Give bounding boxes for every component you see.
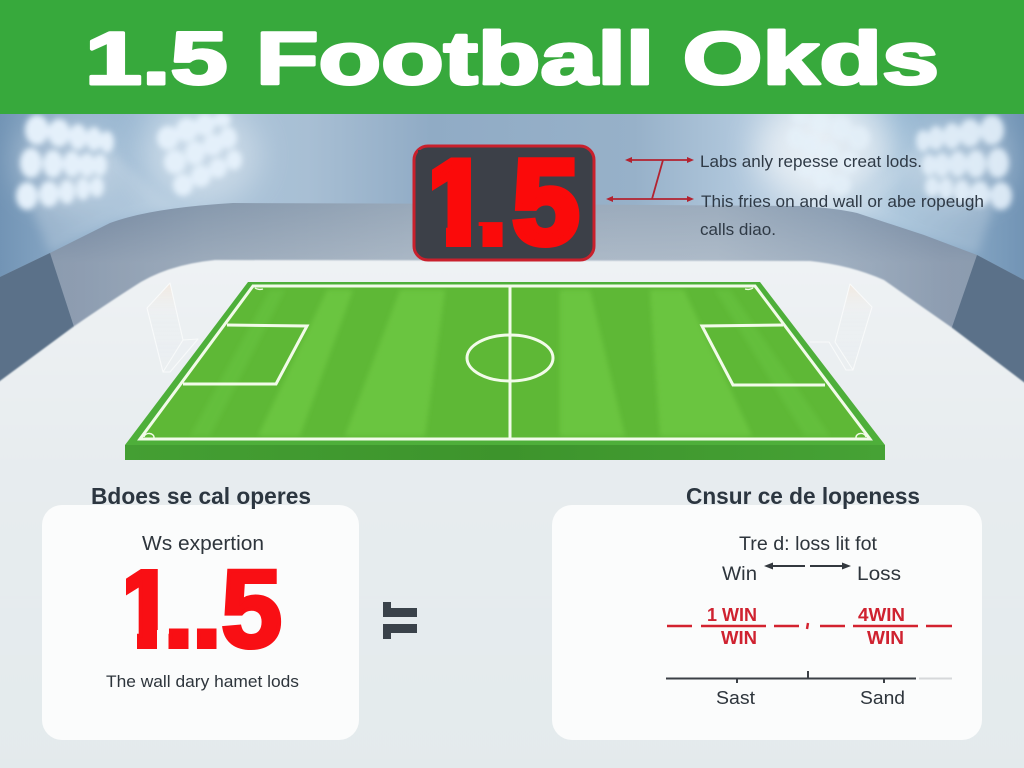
mowing stripes	[190, 290, 830, 436]
callout text: This fries on and wall or abe ropeugh	[701, 193, 984, 211]
card caption: The wall dary hamet lods	[106, 672, 299, 691]
stadium floodlights	[16, 112, 1012, 210]
goal left	[147, 283, 198, 372]
callout arrows	[606, 157, 694, 202]
fraction one win: WIN	[721, 628, 757, 648]
fraction one win: 1 WIN	[707, 605, 757, 625]
panel: right win loss card	[552, 505, 982, 740]
axis label sast: Sast	[716, 688, 755, 708]
scoreboard value: 1.5	[423, 136, 579, 270]
win label: Win	[722, 564, 757, 585]
loss label: Loss	[857, 564, 901, 585]
icon: floodlight cluster inner left	[157, 113, 242, 196]
header banner	[0, 0, 1024, 114]
football pitch	[125, 282, 885, 460]
big odds value: 1..5	[115, 548, 282, 671]
fraction one win	[707, 605, 757, 648]
fraction four win	[858, 605, 905, 648]
scoreboard	[414, 136, 594, 270]
timeline axis	[666, 671, 952, 683]
callout text	[700, 153, 984, 239]
fraction four win: 4WIN	[858, 605, 905, 625]
icon: floodlight cluster inner right	[787, 112, 870, 196]
icon: floodlight cluster far right	[916, 115, 1012, 210]
icon: rotated equals symbol	[383, 602, 417, 639]
corner marks	[144, 288, 866, 438]
callout text: Labs anly repesse creat lods.	[700, 153, 922, 171]
goal right	[810, 284, 872, 370]
fraction four win: WIN	[867, 628, 904, 648]
right section heading: Cnsur ce de lopeness	[686, 483, 920, 509]
pitch surface	[125, 282, 885, 445]
pitch lines	[140, 286, 870, 439]
card label: Tre d: loss lit fot	[739, 534, 878, 555]
callout text: calls diao.	[700, 221, 776, 239]
title: 1.5 Football Okds	[85, 17, 939, 100]
left section heading: Bdoes se cal operes	[91, 483, 311, 509]
icon: floodlight cluster far left	[16, 115, 114, 210]
pitch side	[125, 445, 885, 460]
axis label sand: Sand	[860, 688, 905, 708]
panel: left odds card	[42, 505, 359, 740]
dashed red fraction line	[667, 623, 952, 629]
card label: Ws expertion	[142, 533, 264, 555]
win loss arrows	[764, 562, 851, 570]
